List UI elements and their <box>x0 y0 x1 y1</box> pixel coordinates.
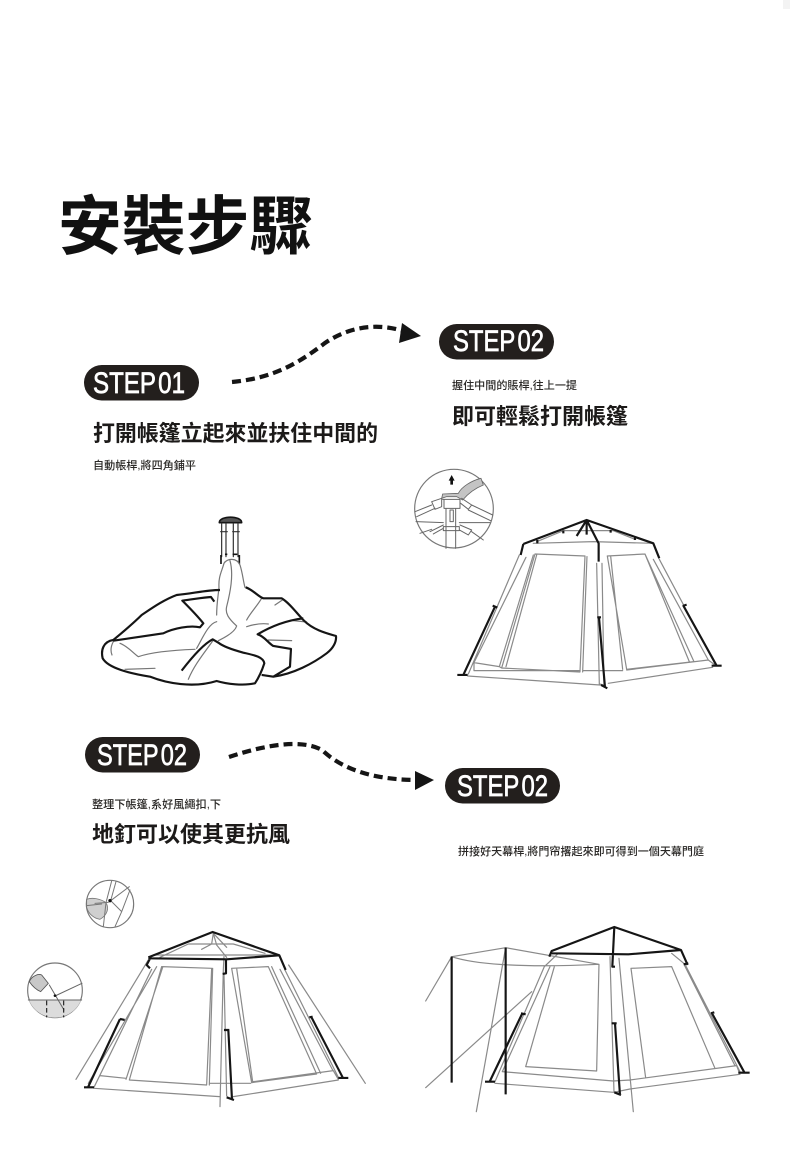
badge: step 02 top: STEP 02 <box>453 325 544 358</box>
text: lower right detail: 拼接好天幕桿,將門帘撂起來即可得到一個天幕門庭 <box>458 844 704 858</box>
panel: step 02 lower left <box>28 737 365 1107</box>
illustration: opened tent <box>457 520 722 688</box>
illustration: tent with guy ropes <box>76 932 365 1107</box>
heading: step 02: 即可輕鬆打開帳篷 <box>452 404 628 429</box>
panel: step 01 <box>84 365 378 685</box>
title: 安裝步驟 <box>58 191 313 263</box>
heading: lower left: 地釘可以使其更抗風 <box>92 822 290 847</box>
arrow: step 02 to step 02 <box>229 744 434 790</box>
text: lower left detail: 整理下帳篷,系好風繩扣,下 <box>92 797 221 811</box>
inset: peg in ground <box>28 963 82 1018</box>
illustration: tent with awning <box>426 927 750 1112</box>
badge: step 01: STEP 01 <box>93 367 185 400</box>
heading: step 01: 打開帳篷立起來並扶住中間的 <box>93 421 378 446</box>
inset: tightening guy rope <box>86 880 134 928</box>
text: step 01 detail: 自動帳桿,將四角鋪平 <box>93 458 196 472</box>
text: step 02 detail: 握住中間的賬桿,往上一提 <box>452 378 577 392</box>
badge: step 02 lower right: STEP 02 <box>457 770 548 803</box>
panel: step 02 lower right <box>426 768 750 1112</box>
inset: lifting the hub <box>415 469 493 548</box>
panel: step 02 top right <box>415 324 722 688</box>
illustration: folded tent with centre pole <box>102 517 336 685</box>
badge: step 02 lower left: STEP 02 <box>97 739 187 772</box>
arrow: step 01 to step 02 <box>232 323 421 382</box>
